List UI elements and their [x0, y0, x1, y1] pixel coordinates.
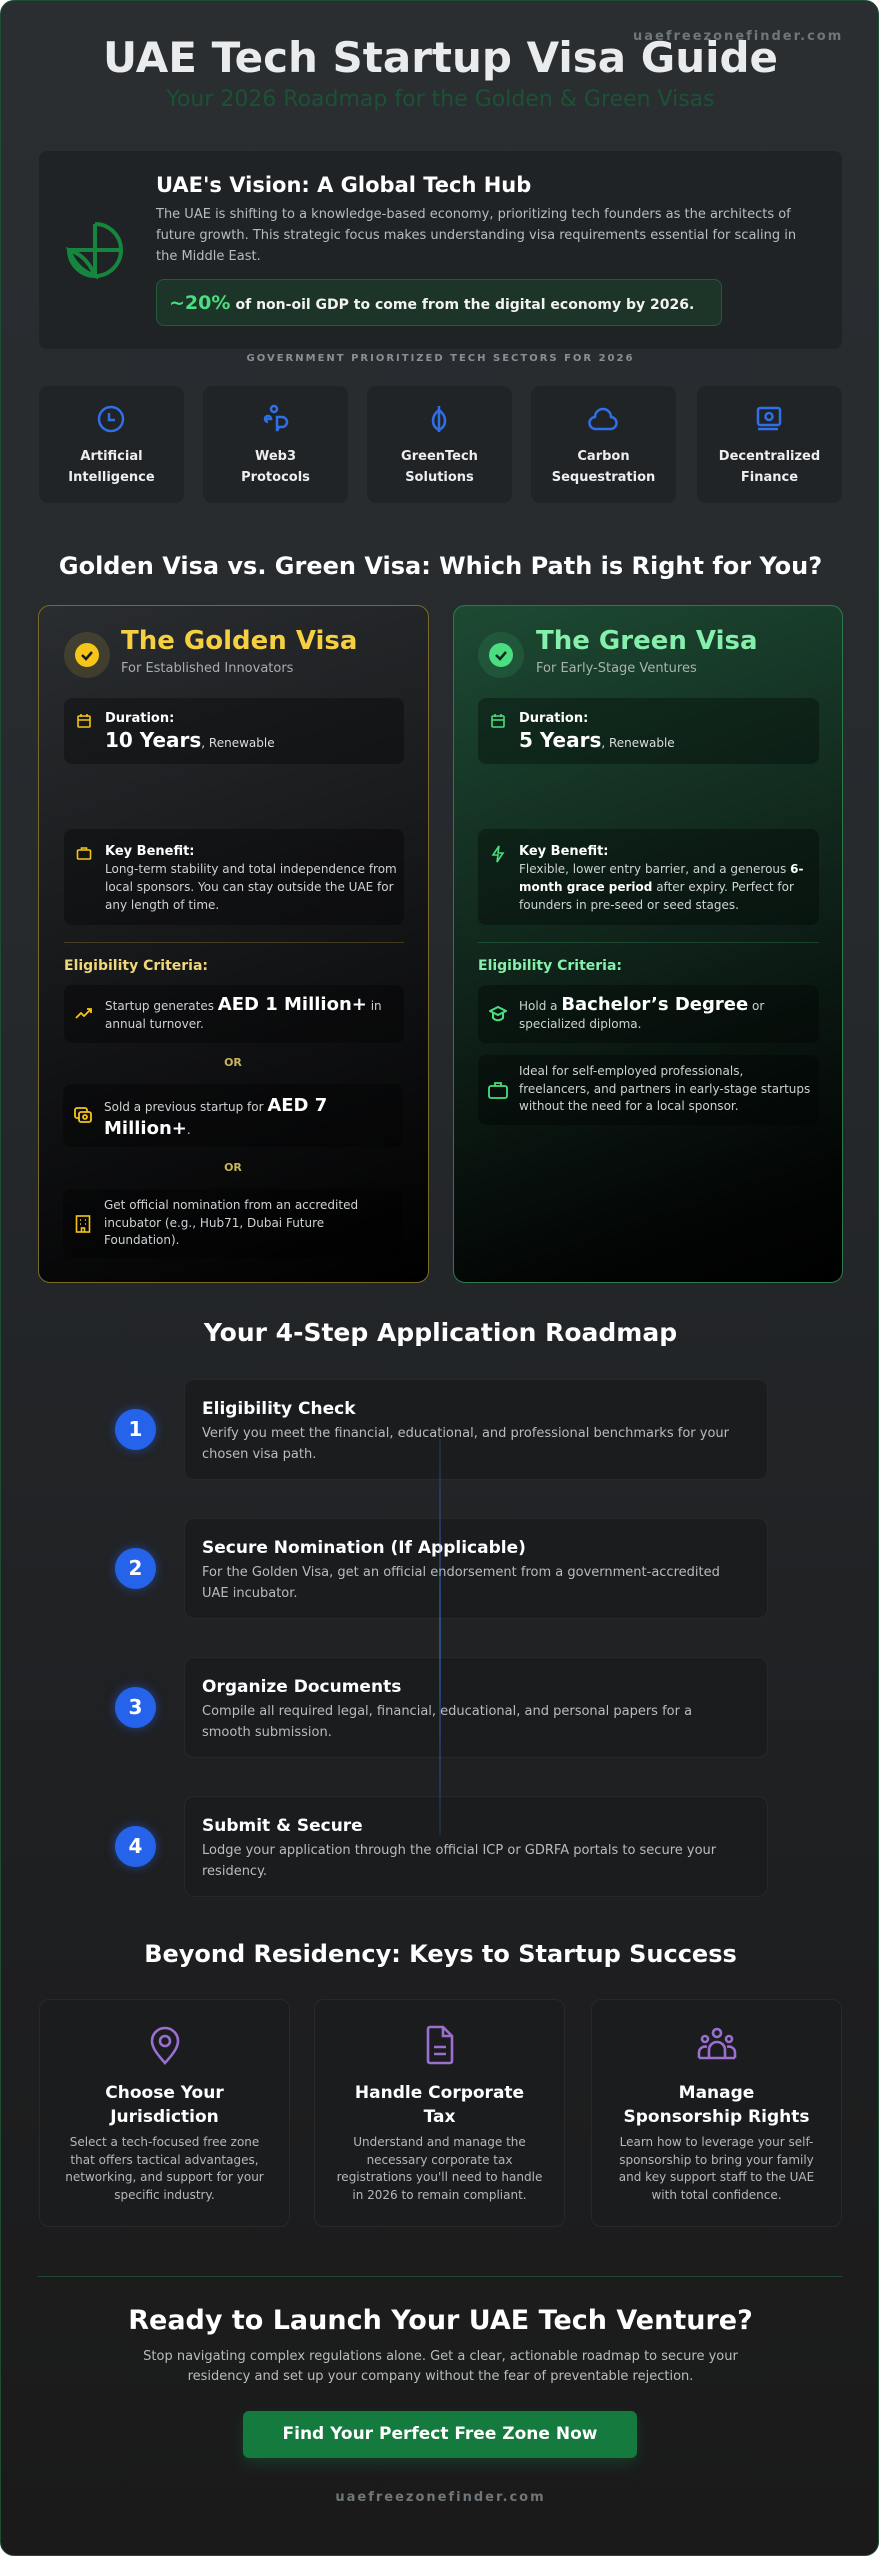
card: sponsorship: sponsorship to bring your family: [619, 2153, 814, 2167]
card: corporate tax: in 2026 to remain compliant.: [352, 2188, 527, 2202]
step 4: Submit & Secure: [202, 1816, 363, 1836]
sector: defi: [697, 386, 842, 503]
criterion self-employed: Ideal for self-employed professionals,: [519, 1064, 743, 1078]
key benefit box: Key Benefit:: [519, 844, 609, 859]
step number 3: [115, 1687, 156, 1728]
sector: AI: Artificial: [80, 449, 143, 464]
cta text: Stop navigating complex regulations alone. Get a clear, actionable roadmap to secure your: [143, 2349, 738, 2364]
card: jurisdiction: Choose Your: [105, 2083, 224, 2103]
text block: future growth. This strategic focus makes understanding visa requirements essential for scaling in: [156, 228, 796, 243]
key benefit box: Long-term stability and total independence from: [105, 862, 397, 876]
card: jurisdiction: that offers tactical advantages,: [70, 2153, 259, 2167]
step 2: UAE incubator.: [202, 1586, 298, 1601]
panel: golden visa: For Established Innovators: [121, 661, 293, 676]
panel: vision: [39, 151, 842, 349]
step number 1: 1: [129, 1417, 142, 1441]
step 1: chosen visa path.: [202, 1447, 316, 1462]
card: corporate tax: Handle Corporate: [355, 2083, 524, 2103]
watermark top: uaefreezonefinder.com: [633, 29, 843, 44]
sector: defi: Decentralized: [719, 449, 820, 464]
step 1: [184, 1379, 768, 1480]
criterion 2: Million+.: [104, 1118, 191, 1139]
sector: carbon: Sequestration: [552, 470, 655, 485]
step 1: Eligibility Check: [202, 1399, 356, 1419]
step number 3: 3: [129, 1695, 142, 1719]
step number 4: [115, 1826, 156, 1867]
step 3: Organize Documents: [202, 1677, 401, 1697]
key benefit box: [64, 829, 404, 925]
eligibility heading: Eligibility Criteria:: [478, 958, 622, 974]
key benefit box: Flexible, lower entry barrier, and a generous 6-: [519, 862, 803, 876]
callout: stat: [156, 279, 722, 326]
sector: greentech: GreenTech: [401, 449, 478, 464]
card: sponsorship: [591, 1999, 842, 2227]
step 2: [184, 1518, 768, 1619]
duration box: Duration:: [519, 711, 588, 726]
step 3: [184, 1657, 768, 1758]
key benefit box: month grace period after expiry. Perfect for: [519, 880, 794, 894]
step 2: Secure Nomination (If Applicable): [202, 1538, 526, 1558]
sector: AI: [39, 386, 184, 503]
icon: green check: [478, 632, 524, 678]
criterion 1: [64, 985, 404, 1043]
card: corporate tax: registrations you'll need to handle: [337, 2170, 542, 2184]
card: sponsorship: Manage: [679, 2083, 754, 2103]
step 4: [184, 1796, 768, 1897]
panel: golden visa: [38, 605, 429, 1283]
heading: comparison: Golden Visa vs. Green Visa: Which Path is Right for You?: [59, 552, 822, 580]
green title: The Green Visa: [536, 626, 758, 656]
sector: greentech: Solutions: [405, 470, 474, 485]
criterion degree: Hold a Bachelor’s Degree or: [519, 994, 764, 1015]
card: corporate tax: [314, 1999, 565, 2227]
callout: stat: ~20% of non-oil GDP to come from the digital economy by 2026.: [169, 292, 694, 314]
step 3: Compile all required legal, financial, educational, and personal papers for a: [202, 1704, 692, 1719]
card: corporate tax: Tax: [424, 2107, 455, 2127]
subtitle: Your 2026 Roadmap for the Golden & Green Visas: [166, 87, 715, 112]
timeline line: [439, 1439, 441, 1835]
criterion degree: [478, 985, 819, 1043]
step 4: Lodge your application through the official ICP or GDRFA portals to secure your: [202, 1843, 716, 1858]
text block: The UAE is shifting to a knowledge-based economy, prioritizing tech founders as the architects of: [156, 207, 791, 222]
heading: beyond residency: Beyond Residency: Keys to Startup Success: [144, 1940, 737, 1968]
key benefit box: Key Benefit:: [105, 844, 195, 859]
card: sponsorship: Learn how to leverage your self-: [620, 2135, 813, 2149]
card: sponsorship: with total confidence.: [651, 2188, 782, 2202]
duration box: [64, 698, 404, 764]
panel: green visa: [453, 605, 843, 1283]
icon: gold check: [64, 632, 110, 678]
step number 2: 2: [129, 1556, 142, 1580]
sectors label: GOVERNMENT PRIORITIZED TECH SECTORS FOR 2026: [247, 353, 634, 364]
step number 2: [115, 1548, 156, 1589]
text block: the Middle East.: [156, 249, 261, 264]
heading: roadmap: Your 4-Step Application Roadmap: [204, 1318, 677, 1347]
criterion 1: annual turnover.: [105, 1017, 204, 1031]
sector: greentech: [367, 386, 512, 503]
criterion 3: [63, 1189, 403, 1258]
sector: web3: Web3: [255, 449, 296, 464]
duration box: 5 Years, Renewable: [519, 728, 675, 752]
criterion 1: Startup generates AED 1 Million+ in: [105, 994, 382, 1015]
key benefit box: founders in pre-seed or seed stages.: [519, 898, 739, 912]
cta text: residency and set up your company without the fear of preventable rejection.: [188, 2369, 693, 2384]
step 3: smooth submission.: [202, 1725, 332, 1740]
key benefit box: local sponsors. You can stay outside the UAE for: [105, 880, 394, 894]
sector: carbon: [531, 386, 676, 503]
card: sponsorship: Sponsorship Rights: [624, 2107, 809, 2127]
key benefit box: any length of time.: [105, 898, 219, 912]
criterion 2: [63, 1084, 403, 1147]
cta text: [143, 2349, 738, 2384]
OR: OR: [224, 1161, 242, 1174]
duration box: 10 Years, Renewable: [105, 728, 275, 752]
golden title: The Golden Visa: [121, 626, 357, 656]
cta heading: Ready to Launch Your UAE Tech Venture?: [128, 2305, 753, 2336]
card: jurisdiction: Jurisdiction: [110, 2107, 219, 2127]
criterion 3: Get official nomination from an accredited: [104, 1198, 358, 1212]
eligibility heading: Eligibility Criteria:: [64, 958, 208, 974]
duration box: Duration:: [105, 711, 174, 726]
step 2: For the Golden Visa, get an official endorsement from a government-accredited: [202, 1565, 720, 1580]
card: corporate tax: necessary corporate tax: [367, 2153, 512, 2167]
watermark footer: uaefreezonefinder.com: [335, 2490, 546, 2505]
title: UAE Tech Startup Visa Guide: [103, 33, 778, 82]
step number 1: [115, 1409, 156, 1450]
card: jurisdiction: networking, and support for your: [65, 2170, 264, 2184]
criterion self-employed: freelancers, and partners in early-stage startups: [519, 1082, 810, 1096]
OR: OR: [224, 1056, 242, 1069]
cta button: [243, 2411, 637, 2458]
cta button: Find Your Perfect Free Zone Now: [283, 2424, 597, 2444]
key benefit box: [478, 829, 819, 925]
duration box: [478, 698, 819, 764]
sector: web3: [203, 386, 348, 503]
criterion 3: incubator (e.g., Hub71, Dubai Future: [104, 1216, 324, 1230]
criterion degree: specialized diploma.: [519, 1017, 641, 1031]
criterion self-employed: without the need for a local sponsor.: [519, 1099, 739, 1113]
criterion 2: Sold a previous startup for AED 7: [104, 1095, 327, 1116]
text block: [156, 207, 796, 264]
criterion self-employed: [478, 1055, 819, 1125]
step number 4: 4: [129, 1834, 142, 1858]
card: jurisdiction: [39, 1999, 290, 2227]
card: corporate tax: Understand and manage the: [353, 2135, 526, 2149]
card: jurisdiction: specific industry.: [114, 2188, 215, 2202]
card: jurisdiction: Select a tech-focused free zone: [70, 2135, 259, 2149]
panel: green visa: For Early-Stage Ventures: [536, 661, 697, 676]
icon: leaf globe: [66, 222, 123, 280]
sector: web3: Protocols: [241, 470, 310, 485]
step 1: Verify you meet the financial, educational, and professional benchmarks for your: [202, 1426, 729, 1441]
criterion 3: Foundation).: [104, 1233, 179, 1247]
sector: defi: Finance: [741, 470, 798, 485]
heading: UAE's Vision: A Global Tech Hub: [156, 173, 531, 197]
sector: carbon: Carbon: [577, 449, 630, 464]
step 4: residency.: [202, 1864, 267, 1879]
card: sponsorship: and key support staff to the UAE: [619, 2170, 814, 2184]
sector: AI: Intelligence: [68, 470, 155, 485]
